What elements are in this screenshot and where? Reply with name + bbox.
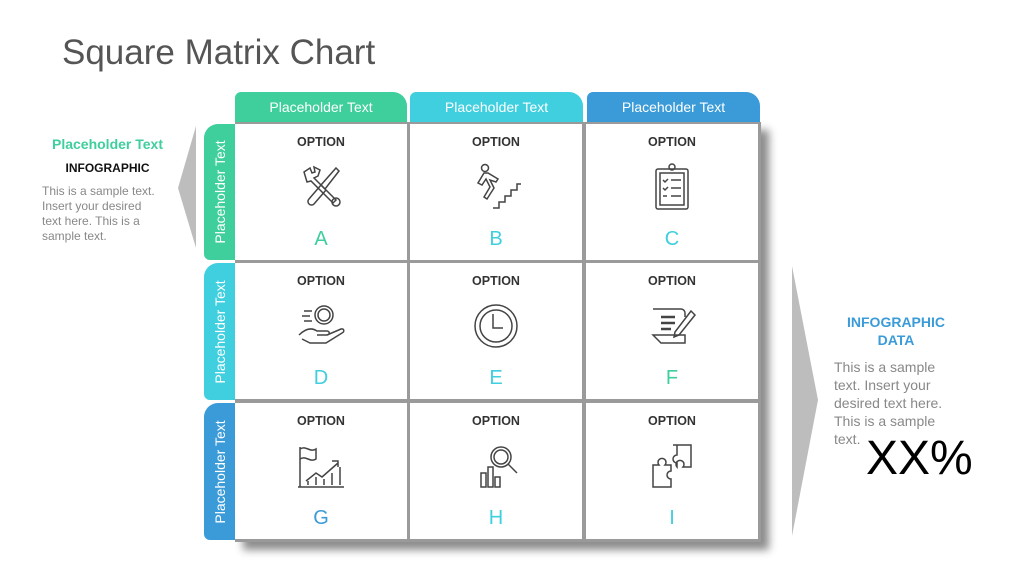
icon: hand coin xyxy=(298,305,344,344)
cell G: G xyxy=(313,507,329,529)
cell E xyxy=(410,263,582,399)
cell H: OPTION xyxy=(472,414,520,428)
text block: right: This is a sample xyxy=(834,359,935,375)
text block: left: This is a sample text. xyxy=(42,184,155,198)
text block: left: Placeholder Text xyxy=(52,136,163,152)
cell H: H xyxy=(489,507,503,529)
cell B: B xyxy=(489,228,503,250)
cell B: OPTION xyxy=(472,135,520,149)
text block: left: sample text. xyxy=(42,229,107,243)
cell F xyxy=(586,263,758,399)
cell D xyxy=(235,263,407,399)
cell F: OPTION xyxy=(648,274,696,288)
text block: left: Insert your desired xyxy=(42,199,141,213)
text block: right: INFOGRAPHIC xyxy=(847,314,945,330)
cell C: OPTION xyxy=(648,135,696,149)
icon: chart flag xyxy=(298,447,344,488)
row header: 1: Placeholder Text xyxy=(212,140,228,244)
cell I xyxy=(586,403,758,539)
icon: stairs person xyxy=(477,164,521,209)
cell D: D xyxy=(314,367,328,389)
cell D: OPTION xyxy=(297,274,345,288)
cell E: E xyxy=(489,367,503,389)
arrow: left xyxy=(178,126,196,248)
column header: 2 xyxy=(410,92,583,122)
icon: tools xyxy=(303,166,341,207)
cell G: OPTION xyxy=(297,414,345,428)
column header: 1: Placeholder Text xyxy=(269,99,373,115)
icon: clipboard xyxy=(655,163,689,210)
column header: 3: Placeholder Text xyxy=(622,99,725,115)
text block: right: DATA xyxy=(878,332,914,348)
icon: magnifier bars xyxy=(480,446,518,488)
cell A: A xyxy=(314,228,328,250)
column header: 1 xyxy=(235,92,407,122)
row header: 2: Placeholder Text xyxy=(212,280,228,383)
row header: 3: Placeholder Text xyxy=(212,420,228,523)
cell A xyxy=(235,124,407,260)
cell B xyxy=(410,124,582,260)
text block: right xyxy=(834,314,973,485)
arrow: right xyxy=(792,266,818,536)
big percentage: XX% xyxy=(866,432,973,485)
icon: puzzle xyxy=(652,444,692,488)
text block: left: text here. This is a xyxy=(42,214,140,228)
row header: 3 xyxy=(204,403,235,540)
column header: 2: Placeholder Text xyxy=(445,99,548,115)
text block: right: desired text here. xyxy=(834,395,942,411)
cell I: I xyxy=(669,507,675,529)
cell E: OPTION xyxy=(472,274,520,288)
cell I: OPTION xyxy=(648,414,696,428)
cell A: OPTION xyxy=(297,135,345,149)
cell C: C xyxy=(665,228,679,250)
cell H xyxy=(410,403,582,539)
text block: right: text. Insert your xyxy=(834,377,930,393)
text block: right: text. xyxy=(834,431,860,447)
matrix grid xyxy=(235,122,761,542)
text block: left: INFOGRAPHIC xyxy=(66,161,150,175)
cell F: F xyxy=(666,367,678,389)
icon: clock xyxy=(474,304,518,348)
cell G xyxy=(235,403,407,539)
row header: 2 xyxy=(204,263,235,400)
column header: 3 xyxy=(587,92,760,122)
title: Square Matrix Chart xyxy=(62,33,375,72)
cell C xyxy=(586,124,758,260)
icon: document pen xyxy=(651,308,696,344)
row header: 1 xyxy=(204,124,235,260)
text block: right: This is a sample xyxy=(834,413,935,429)
text block: left xyxy=(42,136,163,243)
